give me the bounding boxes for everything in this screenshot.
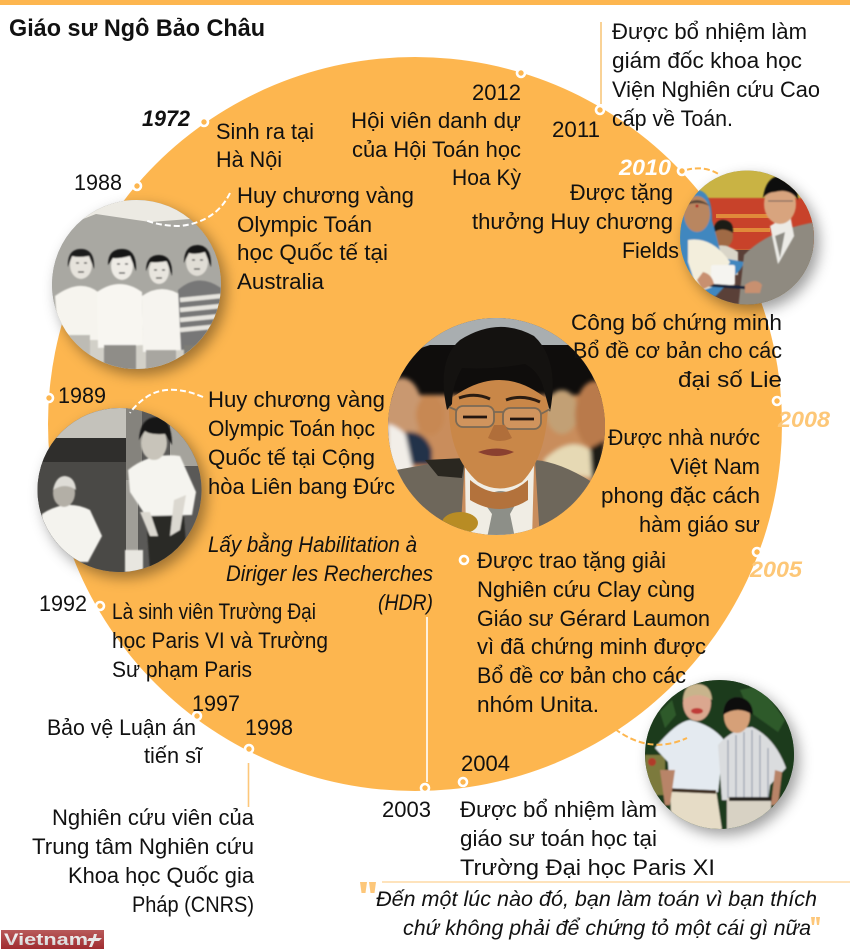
- event 2004: Trường Đại học Paris XI: [460, 855, 715, 880]
- event Clay award: Nghiên cứu Clay cùng: [477, 577, 695, 602]
- event 2010: [472, 155, 679, 263]
- event Clay award: [477, 548, 710, 717]
- event 1992: học Paris VI và Trường: [112, 628, 328, 653]
- event 1997: Bảo vệ Luận án: [47, 715, 196, 740]
- event 2012: Hoa Kỳ: [452, 165, 522, 190]
- event 2008: [571, 310, 830, 432]
- event 1989: [58, 383, 395, 499]
- event 1997: 1997: [192, 691, 240, 716]
- event 1988: Huy chương vàng: [237, 183, 414, 208]
- event HDR: 2003: [382, 797, 431, 822]
- event 2004: 2004: [461, 751, 510, 776]
- event Clay award: Bổ đề cơ bản cho các: [477, 663, 686, 688]
- event 2012: 2012: [472, 80, 521, 105]
- event 1992: [39, 591, 328, 682]
- event HDR: Lấy bằng Habilitation à: [208, 532, 417, 557]
- event 1972: [142, 106, 314, 172]
- event 1988: Olympic Toán: [237, 212, 372, 237]
- event HDR: [208, 532, 433, 822]
- connector: 2004 photo: [615, 729, 687, 745]
- event 1972: 1972: [142, 106, 190, 131]
- event 2005 professor: phong đặc cách: [601, 483, 760, 508]
- photo: central portrait: [382, 316, 615, 540]
- event 2011: Viện Nghiên cứu Cao: [612, 77, 820, 102]
- event 1989: Quốc tế tại Cộng: [208, 445, 375, 470]
- event 2004: giáo sư toán học tại: [460, 826, 657, 851]
- quote: chứ không phải để chứng tỏ một cái gì nữa: [403, 916, 811, 940]
- event 2008: Công bố chứng minh: [571, 310, 782, 335]
- event 1998: [32, 715, 293, 917]
- event 2005 professor: 2005: [749, 557, 802, 582]
- event 1997: [47, 691, 240, 768]
- event 2011: Được bổ nhiệm làm: [612, 19, 807, 44]
- event HDR: Diriger les Recherches: [226, 561, 433, 586]
- photo: two men outdoors: [645, 680, 795, 833]
- event 2008: 2008: [777, 407, 830, 432]
- event Clay award: nhóm Unita.: [477, 692, 599, 717]
- event 1998: Pháp (CNRS): [132, 892, 254, 917]
- event 1989: 1989: [58, 383, 106, 408]
- event 1992: Là sinh viên Trường Đại: [112, 599, 316, 624]
- event 1992: Sư phạm Paris: [112, 657, 252, 682]
- event 1998: Nghiên cứu viên của: [52, 805, 254, 830]
- event Clay award: Được trao tặng giải: [477, 548, 666, 573]
- timeline dots: [45, 69, 781, 792]
- logo: Vietnam+: [1, 930, 104, 949]
- leader lines: [248, 22, 601, 807]
- event 2005 professor: Việt Nam: [670, 454, 760, 479]
- photo: 1989 with elder: [36, 406, 206, 576]
- event 2008: đại số Lie: [678, 367, 782, 392]
- event 2008: Bổ đề cơ bản cho các: [573, 338, 782, 363]
- event 1989: Huy chương vàng: [208, 387, 385, 412]
- event 2004: [460, 751, 715, 880]
- event 2011: 2011: [552, 117, 600, 142]
- event 2004: Được bổ nhiệm làm: [460, 797, 657, 822]
- event 1997: tiến sĩ: [144, 743, 204, 768]
- event 2010: Được tặng: [570, 180, 673, 205]
- connector: 1988 photo: [145, 193, 230, 226]
- large orange timeline circle: [48, 57, 782, 791]
- event 2010: Fields: [622, 238, 679, 263]
- quote: [360, 882, 850, 940]
- event 1989: Olympic Toán học: [208, 416, 375, 441]
- event 1998: Trung tâm Nghiên cứu: [32, 834, 254, 859]
- event 2005 professor: hàm giáo sư: [639, 512, 760, 537]
- event 2011: [552, 19, 820, 142]
- event 1998: 1998: [245, 715, 293, 740]
- event 2005 professor: [601, 425, 802, 582]
- event 2005 professor: Được nhà nước: [608, 425, 760, 450]
- event 1988: học Quốc tế tại: [237, 240, 388, 265]
- event 1988: 1988: [74, 170, 122, 195]
- event 1972: Hà Nội: [216, 147, 282, 172]
- connector: 1989 photo: [130, 390, 203, 413]
- event 2010: 2010: [618, 155, 671, 180]
- event 2012: Hội viên danh dự: [351, 108, 521, 133]
- dashed connectors: [130, 168, 720, 745]
- title: Giáo sư Ngô Bảo Châu: [9, 15, 265, 42]
- quote: Đến một lúc nào đó, bạn làm toán vì bạn thích: [376, 887, 817, 911]
- photo: four students 1988: [50, 198, 225, 375]
- photo: Fields medal ceremony: [678, 169, 816, 310]
- event 1998: Khoa học Quốc gia: [68, 863, 254, 888]
- top bar: [0, 0, 850, 5]
- event 1992: 1992: [39, 591, 87, 616]
- event Clay award: Giáo sư Gérard Laumon: [477, 606, 710, 631]
- event 2012: [351, 80, 522, 190]
- event 1988: [74, 170, 414, 294]
- event 2010: thưởng Huy chương: [472, 209, 673, 234]
- event Clay award: vì đã chứng minh được: [477, 634, 706, 659]
- event 1972: Sinh ra tại: [216, 119, 314, 144]
- event 2012: của Hội Toán học: [352, 137, 521, 162]
- event HDR: (HDR): [378, 590, 433, 615]
- event 1989: hòa Liên bang Đức: [208, 474, 395, 499]
- event 1988: Australia: [237, 269, 324, 294]
- event 2011: giám đốc khoa học: [612, 48, 802, 73]
- logo: Vietnam+: Vietnam: [4, 930, 88, 949]
- connector: 2010 photo: [686, 168, 720, 175]
- event 2011: cấp về Toán.: [612, 106, 733, 131]
